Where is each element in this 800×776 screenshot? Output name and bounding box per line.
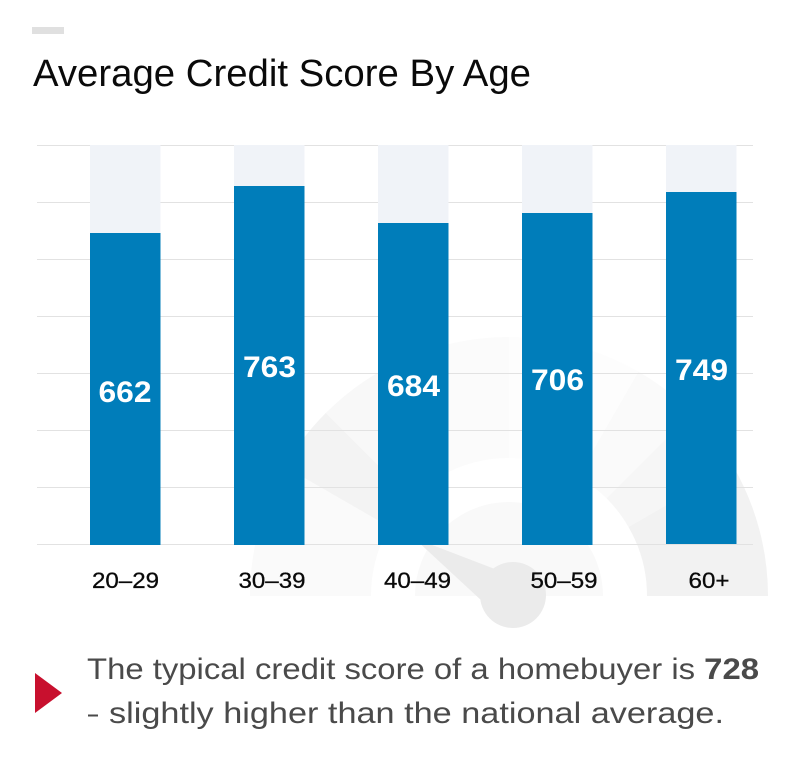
bar: 50-59 [522, 145, 592, 545]
bar: 40-49: 684 [387, 370, 440, 403]
callout text: – [88, 697, 98, 730]
bar: 40-49 [378, 145, 448, 545]
x-axis labels: 60+ [688, 568, 730, 593]
callout text: slightly higher than the national average. [109, 697, 724, 730]
chart gridlines [37, 146, 753, 544]
callout text: The typical credit score of a homebuyer is 728 [87, 653, 759, 686]
callout text [87, 653, 759, 730]
bar: 20-29: 662 [98, 376, 152, 409]
bar: 60+ [666, 145, 736, 544]
x-axis labels: 50–59 [530, 568, 598, 593]
x-axis labels: 20–29 [92, 568, 159, 593]
x-axis labels [92, 568, 730, 593]
accent dash [32, 27, 64, 34]
bar: 50-59: 706 [531, 364, 584, 397]
bar: 60+: 749 [675, 354, 728, 387]
bar: 20-29 [90, 145, 160, 545]
bar: 30-39: 763 [243, 351, 296, 384]
x-axis labels: 30–39 [238, 568, 306, 593]
x-axis labels: 40–49 [384, 568, 451, 593]
watermark: credit gauge [250, 337, 768, 628]
title: Average Credit Score By Age [33, 53, 531, 95]
icon: red triangle [35, 673, 62, 713]
bar: 30-39 [234, 145, 304, 545]
